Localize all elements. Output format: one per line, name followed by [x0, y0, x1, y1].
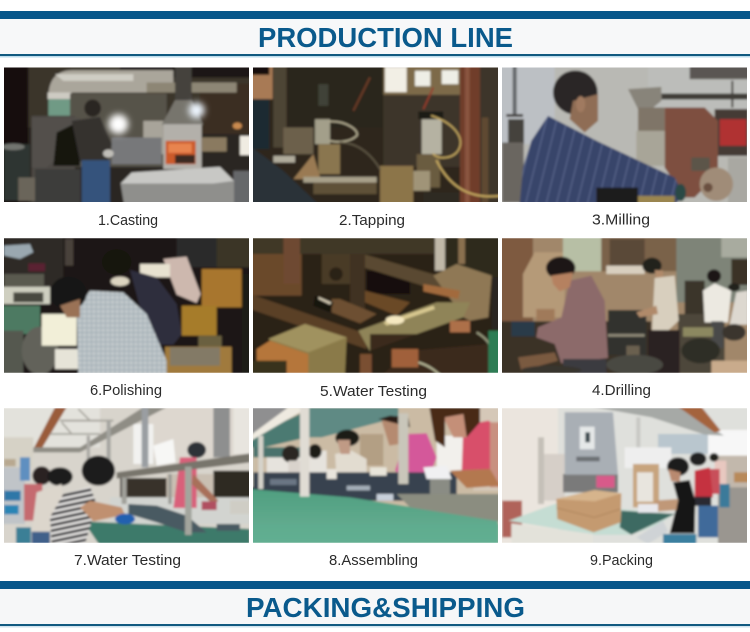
front worker: [42, 277, 167, 374]
header: packing and shipping: [0, 581, 750, 628]
cast iron pots: [521, 324, 746, 375]
lower block: [257, 324, 372, 374]
caption: water testing: 7.Water Testing: [74, 553, 181, 569]
lower machinery: [498, 310, 750, 376]
green shelf: [250, 407, 398, 457]
worker with bun: [335, 430, 367, 479]
worker in striped shirt: [520, 70, 686, 204]
caption: assembling: 8.Assembling: [329, 553, 418, 569]
worker 3: [703, 269, 731, 348]
panel: step 6 polishing: [0, 234, 253, 399]
open carton: [633, 464, 659, 507]
caption: tapping: 2.Tapping: [339, 213, 405, 229]
panel: step 8 assembling: [250, 404, 503, 569]
photo: water testing machine: [253, 238, 498, 373]
brochure: [636, 521, 668, 544]
white bags: [625, 447, 671, 468]
panel: step 4 drilling: [498, 234, 750, 399]
back worker: [140, 237, 201, 303]
photo: drilling: [502, 238, 747, 373]
panel: step 2 tapping: [250, 64, 503, 229]
header: production line: [0, 11, 750, 58]
packing table: [509, 503, 675, 546]
panel: step 9 packing: [498, 404, 750, 569]
left cylinder and press: [293, 119, 377, 194]
mill machine: [628, 87, 748, 201]
assembly table: [83, 467, 250, 546]
melting tank: [121, 167, 234, 204]
man at furnace: [72, 100, 114, 204]
worker 1: [536, 257, 608, 374]
photo: polishing: [4, 238, 249, 373]
bright crossbar: [358, 284, 470, 351]
panel: step 5 water testing machine: [250, 234, 503, 400]
caption: water testing: 5.Water Testing: [320, 384, 427, 400]
hoses: [330, 116, 500, 196]
stacked carton: [556, 490, 621, 532]
middle worker: [102, 249, 182, 345]
far workers in red: [690, 452, 726, 506]
white posts: [250, 407, 408, 497]
title: production line: PRODUCTION LINE: [258, 22, 513, 53]
overhead beams: [591, 407, 724, 451]
caption: packing: 9.Packing: [590, 553, 653, 569]
worker in magenta: [378, 416, 437, 481]
worker in black packing: [638, 457, 696, 546]
photo: packing: [502, 408, 747, 543]
front worker in coral: [423, 407, 503, 488]
caption: milling: 3.Milling: [592, 212, 650, 228]
assembly table: [250, 469, 500, 546]
caption: polishing: 6.Polishing: [90, 383, 162, 399]
caption: drilling: 4.Drilling: [592, 383, 651, 399]
title: packing and shipping: PACKING&SHIPPING: [246, 592, 525, 623]
far workers: [282, 444, 322, 474]
photo: water testing line: [4, 408, 249, 543]
photo: casting: [4, 68, 249, 202]
caption: casting: 1.Casting: [98, 213, 158, 229]
far worker in pink: [173, 442, 218, 510]
worker 4: [728, 283, 748, 325]
front worker in striped top: [50, 456, 135, 544]
machine left: [502, 114, 524, 202]
furnace: [163, 124, 202, 169]
ceiling beams: [33, 404, 167, 467]
rusty cylinder: [313, 291, 410, 323]
panel: step 1 casting: [0, 64, 253, 229]
right cylinder and valve box: [380, 112, 460, 204]
control cabinet: [563, 412, 618, 492]
panel: step 3 milling: [498, 64, 750, 229]
photo: tapping: [253, 68, 498, 202]
panel: step 7 water testing line: [0, 404, 253, 569]
worker on left: [250, 64, 318, 204]
photo: assembling: [253, 408, 498, 543]
back shelves: [0, 457, 30, 524]
worker 2: [636, 258, 680, 375]
photo: milling: [502, 68, 747, 202]
crates: [165, 269, 242, 375]
worker behind 3: [16, 466, 51, 544]
top frame: [363, 254, 490, 302]
worker behind 2: [32, 467, 73, 545]
